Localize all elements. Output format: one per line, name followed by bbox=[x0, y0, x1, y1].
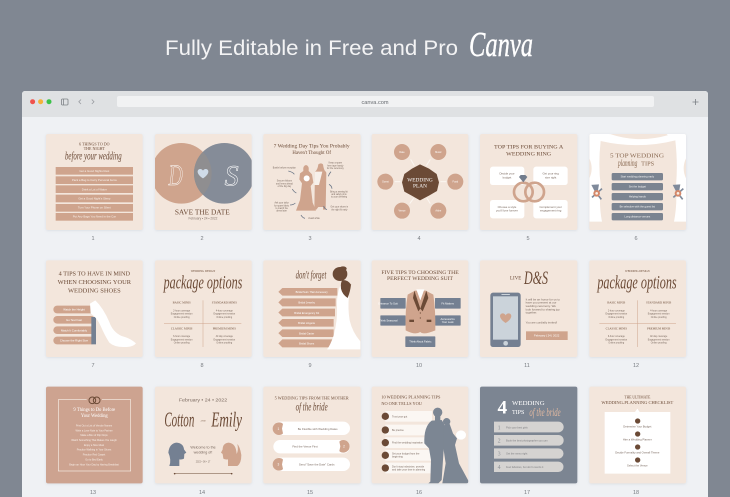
template card 3: wedding day tips: Secure ribbons bbox=[277, 180, 293, 183]
template card 13: things to do before your wedding: Make a Box of Flip Flops bbox=[80, 434, 108, 437]
template card 7: wedding shoes: WHEN CHOOSING YOUR bbox=[58, 280, 132, 286]
template card 10: choosing wedding suit: Entrance To Suit bbox=[378, 302, 398, 306]
template card 1: things to do the night before: Turn Your Phone on Silent bbox=[78, 206, 111, 210]
template card 13: things to do before your wedding: Watch Something That Makes You Laugh bbox=[71, 439, 117, 442]
template card 18: ultimate checklist bbox=[589, 387, 686, 483]
template card 1: things to do the night before: Get a Good Nights Rest bbox=[79, 169, 110, 173]
template card 2: save the date: S bbox=[225, 160, 239, 193]
template card 6: wedding planning tips: Helping hands bbox=[629, 195, 646, 199]
template card 18: ultimate checklist: WEDDING-PLANNING CHECKLIST bbox=[601, 401, 674, 405]
template card 17: four wedding tips of the bride: Book the best photographer you can bbox=[506, 439, 548, 443]
template card 12: package options bbox=[589, 260, 686, 357]
template card 8: package options: 4-hour coverage bbox=[216, 309, 234, 312]
card number 7: 7 bbox=[91, 363, 95, 369]
template card 4: wedding plan diagram: Food bbox=[452, 181, 459, 184]
template card 8: package options: Online proofing bbox=[216, 316, 233, 319]
template card 13: things to do before your wedding: Practice Red Carpet bbox=[83, 454, 105, 457]
template card 18: ultimate checklist: Determine Your Budget bbox=[623, 425, 652, 429]
template card 3: wedding day tips: Bring a sewing kit bbox=[330, 190, 348, 193]
template card 17: four wedding tips of the bride: 1 bbox=[498, 425, 501, 431]
template card 3: wedding day tips: dress later bbox=[276, 210, 287, 213]
template card 10: choosing wedding suit: Fit Matters bbox=[441, 302, 455, 306]
icon: groom head profile bbox=[168, 443, 186, 466]
template card 12: package options: BASIC MINIS bbox=[607, 301, 626, 305]
template card 11: live wedding invitation: D&S bbox=[523, 268, 548, 289]
template card 11: live wedding invitation: February | 24 | 2022 bbox=[534, 334, 560, 338]
template card 12: package options: All day coverage bbox=[650, 335, 668, 338]
template card 4: wedding plan diagram: Date bbox=[399, 151, 405, 154]
template card 11: live wedding invitation: look forward to sharing joy bbox=[526, 307, 560, 311]
template card 5: buying a wedding ring: size right bbox=[545, 175, 557, 179]
template card 8: package options bbox=[155, 260, 252, 357]
card number 12: 12 bbox=[633, 363, 639, 369]
template card 17: four wedding tips of the bride: 2 bbox=[498, 439, 501, 445]
template card 16: planning tips with couple silhouette bbox=[372, 387, 468, 483]
template card 9: don't forget bride checklist: don't forget bbox=[296, 268, 327, 282]
template card 15: tips from the mother of the bride: 2 bbox=[343, 445, 345, 449]
template card 8: package options: PREMIUM MINIS bbox=[213, 326, 236, 330]
template card 1: things to do the night before: Get a Good Night's Sleep bbox=[78, 196, 111, 200]
canva logo wordmark: Canva bbox=[469, 25, 533, 64]
card number 1: 1 bbox=[91, 236, 95, 242]
template card 9: don't forget bride checklist: Bridal Suit / Hair Accessory bbox=[296, 290, 328, 294]
template card 8: package options: Online proofing bbox=[174, 316, 190, 319]
template card 9: don't forget bride checklist: Bridal Garter bbox=[299, 331, 314, 335]
template card 3: wedding day tips: hem tape handy bbox=[327, 164, 344, 167]
template card 12: package options: CLASSIC MINIS bbox=[606, 326, 627, 330]
template card 9: don't forget bride checklist: Bridal Shoes bbox=[299, 342, 315, 346]
couple silhouette bbox=[424, 408, 468, 483]
template card 8: package options: CLASSIC MINIS bbox=[171, 326, 193, 330]
template card 3: wedding day tips: Keep a spare bbox=[329, 162, 343, 165]
template card 6: wedding planning tips: Start wedding planning early bbox=[621, 175, 655, 179]
template card 3: wedding day tips: Get your shoes in bbox=[331, 206, 349, 209]
template card 8: package options: Engagement session bbox=[213, 313, 236, 316]
template card 16: planning tips with couple silhouette: beginning bbox=[392, 456, 403, 459]
template card 17: four wedding tips of the bride: 4 bbox=[498, 465, 501, 471]
template card 11: live wedding invitation: LIVE bbox=[510, 277, 521, 282]
icon: bouquet bbox=[456, 430, 466, 440]
template card 1: things to do the night before: 6 THINGS TO DO bbox=[79, 141, 110, 146]
template card 4: wedding plan diagram: Guest bbox=[382, 181, 389, 184]
template card 7: wedding shoes: Watch the Height bbox=[63, 308, 85, 312]
template card 17: four wedding tips of the bride: WEDDING bbox=[512, 401, 545, 407]
template card 18: ultimate checklist: Select the Venue bbox=[627, 464, 648, 468]
icon: smartphone with heart bbox=[490, 293, 521, 347]
template card 17: four wedding tips of the bride: 4 bbox=[497, 398, 507, 419]
template card 11: live wedding invitation: have you present at our bbox=[526, 301, 556, 305]
card number 10: 10 bbox=[416, 363, 422, 369]
template card 11: live wedding invitation: wedding ceremony. We bbox=[526, 304, 556, 308]
template card 5: buying a wedding ring: engagement ring bbox=[540, 209, 562, 213]
card number 6: 6 bbox=[634, 236, 638, 242]
template card 1: things to do the night before: THE NIGHT bbox=[84, 146, 105, 151]
template card 13: things to do before your wedding bbox=[46, 387, 143, 483]
template card 13: things to do before your wedding: Write a Love Note to Your Partner bbox=[75, 429, 113, 432]
template card 18: ultimate checklist: Hire a Wedding Planner bbox=[623, 438, 652, 442]
template card 16: planning tips with couple silhouette: NO ONE TELLS YOU bbox=[381, 401, 423, 406]
template card 12: package options: 4-hour coverage bbox=[650, 309, 668, 312]
template card 8: package options: BASIC MINIS bbox=[173, 301, 191, 305]
template card 1: things to do the night before: before your wedding bbox=[65, 148, 122, 162]
template card 15: tips from the mother of the bride: of the bride bbox=[296, 400, 328, 414]
template card 16: planning tips with couple silhouette: 10 WEDDING PLANNING TIPS bbox=[381, 395, 441, 400]
template card 10: choosing wedding suit: Your Look bbox=[442, 320, 454, 324]
template card 12: package options: Engagement session bbox=[605, 338, 628, 341]
icon: right flower bouquet bbox=[673, 185, 683, 199]
template card 13: things to do before your wedding: Enjoy a Nice Meal bbox=[84, 444, 104, 447]
template card 3: wedding day tips: for the ceremony bbox=[327, 167, 345, 170]
template card 8: package options: All day coverage bbox=[216, 335, 234, 338]
template card 5: buying a wedding ring: you'll love forever bbox=[496, 209, 518, 213]
template card 7: wedding shoes: Match It Comfortably bbox=[61, 328, 88, 332]
template card 12: package options: package options bbox=[596, 272, 677, 293]
template card 4: wedding plan diagram bbox=[372, 134, 468, 230]
template card 5: buying a wedding ring: WEDDING RING bbox=[506, 152, 551, 158]
template card 10: choosing wedding suit: Accessorize bbox=[441, 317, 455, 321]
template card 17: four wedding tips of the bride: Pick your best girls bbox=[506, 425, 528, 429]
template card 16: planning tips with couple silhouette: Find the wedding inspiration bbox=[392, 442, 424, 445]
template card 2: save the date bbox=[151, 134, 255, 230]
template card 11: live wedding invitation bbox=[480, 260, 577, 357]
icon: suit jacket bbox=[406, 289, 435, 333]
card number 15: 15 bbox=[307, 490, 313, 496]
browser window bbox=[22, 91, 708, 497]
template card 9: don't forget bride checklist bbox=[263, 260, 361, 357]
template card 17: four wedding tips of the bride bbox=[480, 387, 577, 483]
template card 15: tips from the mother of the bride: 5 WEDDING TIPS FROM THE MOTHER bbox=[275, 397, 349, 401]
icon: interlocked rings bbox=[514, 175, 544, 201]
template card 4: wedding plan diagram: Attire bbox=[435, 210, 442, 213]
template card 11: live wedding invitation: It will be an honor for us to bbox=[526, 297, 560, 301]
template card 8: package options: Engagement session bbox=[171, 338, 193, 341]
template card 4: wedding plan diagram: Music bbox=[435, 151, 442, 154]
template card 3: wedding day tips: Bustle before reception bbox=[273, 166, 297, 169]
template card 18: ultimate checklist: Decide Formality and Overall Theme bbox=[615, 451, 660, 455]
template card 6: wedding planning tips: Long distance venues bbox=[624, 215, 651, 219]
template card 14: cotton and emily invitation: Welcome to the bbox=[190, 446, 216, 450]
template card 2: save the date: February • 24 • 2022 bbox=[189, 217, 218, 221]
template card 7: wedding shoes bbox=[46, 260, 143, 357]
template card 6: wedding planning tips: TIPS bbox=[641, 160, 655, 167]
template card 12: package options: Online proofing bbox=[651, 316, 667, 319]
template card 3: wedding day tips bbox=[263, 134, 361, 230]
template card 9: don't forget bride checklist: Bridal Lingerie bbox=[298, 321, 316, 325]
template card 17: four wedding tips of the bride: Feel fabulous, but don't overdo it bbox=[506, 465, 544, 469]
template card 8: package options: Online proofing bbox=[216, 342, 233, 345]
template card 13: things to do before your wedding: Practice Walking in Your Shoes bbox=[77, 449, 112, 452]
template card 5: buying a wedding ring: Complement your bbox=[540, 205, 562, 209]
template card 1: things to do the night before: Drink a Lot of Water bbox=[82, 187, 107, 191]
template card 8: package options: WEDDING DESIGN bbox=[191, 269, 215, 273]
template card 10: choosing wedding suit: Think About Fabric bbox=[409, 340, 432, 344]
template card 3: wedding day tips: the right fit early bbox=[331, 208, 348, 211]
template card 16: planning tips with couple silhouette: Be precise bbox=[392, 429, 404, 432]
template card 14: cotton and emily invitation: AND bbox=[200, 419, 206, 422]
card number 3: 3 bbox=[308, 236, 312, 242]
template card 3: wedding day tips: for spare fabric bbox=[274, 204, 290, 207]
template card 6: wedding planning tips: 5 TOP WEDDING bbox=[610, 152, 664, 159]
template card 7: wedding shoes: Go Test Fast bbox=[66, 318, 82, 322]
template card 3: wedding day tips: and safety pins bbox=[331, 193, 347, 196]
template card 15: tips from the mother of the bride: Be Flexible with Wedding Dates bbox=[298, 427, 338, 431]
template card 12: package options: 6-hour coverage bbox=[608, 335, 626, 338]
template card 17: four wedding tips of the bride: of the bride bbox=[529, 405, 561, 419]
icon: bridal high heel shoe bbox=[90, 300, 136, 347]
template card 12: package options: Engagement session bbox=[648, 313, 670, 316]
template card 5: buying a wedding ring bbox=[480, 134, 577, 230]
template card 3: wedding day tips: 7 Wedding Day Tips You Probably bbox=[274, 145, 350, 150]
headline bbox=[165, 25, 533, 64]
template card 13: things to do before your wedding: Your Wedding bbox=[81, 414, 108, 419]
template card 1: things to do the night before: Pack a Bag to Carry Personal Items bbox=[72, 178, 117, 182]
template card 18: ultimate checklist: THE ULTIMATE bbox=[624, 396, 651, 400]
template card 11: live wedding invitation: together. bbox=[526, 311, 537, 315]
template card 16: planning tips with couple silhouette: Set your budget from the bbox=[392, 453, 420, 456]
template card 5: buying a wedding ring: Get your ring bbox=[542, 172, 559, 176]
template card 4: wedding plan diagram: Venue bbox=[398, 210, 406, 213]
template card 17: four wedding tips of the bride: 3 bbox=[498, 452, 501, 458]
card number 5: 5 bbox=[526, 236, 530, 242]
template card 6: wedding planning tips bbox=[589, 134, 686, 230]
template card 3: wedding day tips: Haven't Thought Of bbox=[292, 151, 331, 156]
card number 16: 16 bbox=[416, 490, 422, 496]
template card 14: cotton and emily invitation: Cotton bbox=[164, 410, 194, 432]
template card 5: buying a wedding ring: budget bbox=[503, 175, 512, 179]
card number 13: 13 bbox=[90, 490, 96, 496]
template card 1: things to do the night before bbox=[46, 134, 143, 230]
card number 9: 9 bbox=[308, 363, 312, 369]
card number 18: 18 bbox=[633, 490, 639, 496]
template card 8: package options: package options bbox=[162, 272, 242, 293]
template card 8: package options: Online proofing bbox=[174, 342, 190, 345]
template card 16: planning tips with couple silhouette: Don't stay indecisive, provide bbox=[392, 465, 425, 468]
card number 8: 8 bbox=[200, 363, 204, 369]
card number 14: 14 bbox=[199, 490, 205, 496]
card number 17: 17 bbox=[524, 490, 530, 496]
template card 12: package options: PREMIUM MINIS bbox=[647, 326, 671, 330]
template card 12: package options: 2-hour coverage bbox=[608, 309, 626, 312]
template card 7: wedding shoes: WEDDING SHOES bbox=[68, 289, 121, 295]
template card 3: wedding day tips: and hems ahead bbox=[276, 183, 293, 185]
template card 15: tips from the mother of the bride: Find the Venue First bbox=[292, 445, 318, 449]
template card 8: package options: Engagement session bbox=[171, 313, 193, 316]
template card 12: package options: STANDARD MINIS bbox=[646, 301, 672, 305]
template card 16: planning tips with couple silhouette: Trust your gut bbox=[392, 415, 408, 418]
template card 17: four wedding tips of the bride: Get the menu right bbox=[506, 452, 528, 456]
template card 5: buying a wedding ring: TOP TIPS FOR BUYING A bbox=[494, 145, 564, 151]
card number 4: 4 bbox=[417, 236, 421, 242]
template card 7: wedding shoes: Choose the Right Size bbox=[60, 339, 88, 343]
template card 13: things to do before your wedding: Begin an Hour Your Day by Having Breakfast bbox=[69, 463, 119, 466]
template card 4: wedding plan diagram: WEDDING bbox=[407, 178, 433, 184]
template card 10: choosing wedding suit: PERFECT WEDDING SUIT bbox=[387, 276, 454, 282]
template card 10: choosing wedding suit bbox=[372, 260, 468, 357]
template card 13: things to do before your wedding: Print Out a List of Vendor Names bbox=[76, 424, 113, 427]
template card 3: wedding day tips: to your dressing bbox=[331, 196, 348, 199]
template card 8: package options: STANDARD MINIS bbox=[212, 301, 237, 305]
template card 16: planning tips with couple silhouette: and take your time in planning bbox=[392, 468, 426, 471]
template card 10: choosing wedding suit: Think Seasonal bbox=[379, 319, 398, 323]
template card 15: tips from the mother of the bride: 1 bbox=[277, 427, 279, 431]
template card 15: tips from the mother of the bride: 3 bbox=[277, 463, 279, 467]
card number 11: 11 bbox=[524, 363, 530, 369]
template card 7: wedding shoes: 4 TIPS TO HAVE IN MIND bbox=[59, 272, 131, 278]
bride silhouette bbox=[327, 266, 360, 349]
icon: left flower bouquet bbox=[592, 185, 602, 199]
template card 13: things to do before your wedding: 9 Things to Do Before bbox=[73, 408, 115, 413]
template card 9: don't forget bride checklist: Bridal Emergency Kit bbox=[294, 311, 319, 315]
headline: Fully Editable in Free and Pro bbox=[165, 36, 458, 60]
template card 3: wedding day tips: Ask your tailor bbox=[275, 202, 289, 205]
template card 13: things to do before your wedding: Go to Bed Early bbox=[85, 458, 104, 461]
template card 3: wedding day tips: Avoid white bbox=[308, 217, 320, 220]
browser toolbar: canva.com bbox=[361, 100, 389, 106]
icon: bride head profile bbox=[221, 443, 241, 466]
template card 2: save the date: D bbox=[168, 159, 183, 192]
template card 5: buying a wedding ring: Decide your bbox=[499, 172, 515, 176]
template card 12: package options: Online proofing bbox=[651, 342, 667, 345]
template card 14: cotton and emily invitation: wedding of! bbox=[194, 451, 212, 455]
template card 12: package options: Engagement session bbox=[605, 313, 628, 316]
template card 14: cotton and emily invitation: Emily bbox=[211, 410, 243, 432]
template card 9: don't forget bride checklist: Bridal Jewelry bbox=[298, 301, 316, 305]
icon: wedding rings bbox=[89, 397, 100, 404]
browser toolbar bbox=[22, 91, 708, 117]
template card 5: buying a wedding ring: Choose a style bbox=[498, 205, 517, 209]
template card 11: live wedding invitation: You are cordially invited! bbox=[526, 321, 557, 325]
template card 14: cotton and emily invitation bbox=[155, 387, 252, 483]
template card 14: cotton and emily invitation: 2022 • 06 • 17 bbox=[196, 462, 211, 464]
template card 8: package options: 6-hour coverage bbox=[173, 335, 191, 338]
template card 2: save the date: SAVE THE DATE bbox=[175, 209, 230, 217]
template card 4: wedding plan diagram: PLAN bbox=[413, 184, 427, 190]
card number 2: 2 bbox=[200, 236, 204, 242]
template card 12: package options: Online proofing bbox=[608, 316, 625, 319]
template card 6: wedding planning tips: Be selective with the guest list bbox=[620, 205, 655, 209]
template card 6: wedding planning tips: Set the budget bbox=[629, 185, 646, 189]
template card 3: wedding day tips: of the big day bbox=[278, 185, 292, 188]
template card 6: wedding planning tips: planning bbox=[617, 158, 638, 168]
template card 12: package options: WEDDING DESIGN bbox=[625, 269, 650, 273]
template card 8: package options: 2-hour coverage bbox=[173, 309, 191, 312]
template card 8: package options: Engagement session bbox=[213, 338, 236, 341]
template card 15: tips from the mother of the bride bbox=[263, 387, 361, 483]
template card 14: cotton and emily invitation: February • 24 • 2022 bbox=[179, 398, 228, 403]
template card 12: package options: Online proofing bbox=[608, 342, 625, 345]
template card 10: choosing wedding suit: FIVE TIPS TO CHOOSING THE bbox=[381, 270, 459, 276]
template card 15: tips from the mother of the bride: Send "Save the Date" Cards bbox=[299, 463, 335, 467]
groom and bride silhouette bbox=[296, 163, 326, 211]
template card 17: four wedding tips of the bride: TIPS bbox=[512, 410, 524, 416]
template card 1: things to do the night before: Put Any Bags You Need in the Car bbox=[73, 215, 116, 219]
template card 12: package options: Engagement session bbox=[648, 338, 670, 341]
template card 3: wedding day tips: to match the bbox=[275, 207, 289, 210]
